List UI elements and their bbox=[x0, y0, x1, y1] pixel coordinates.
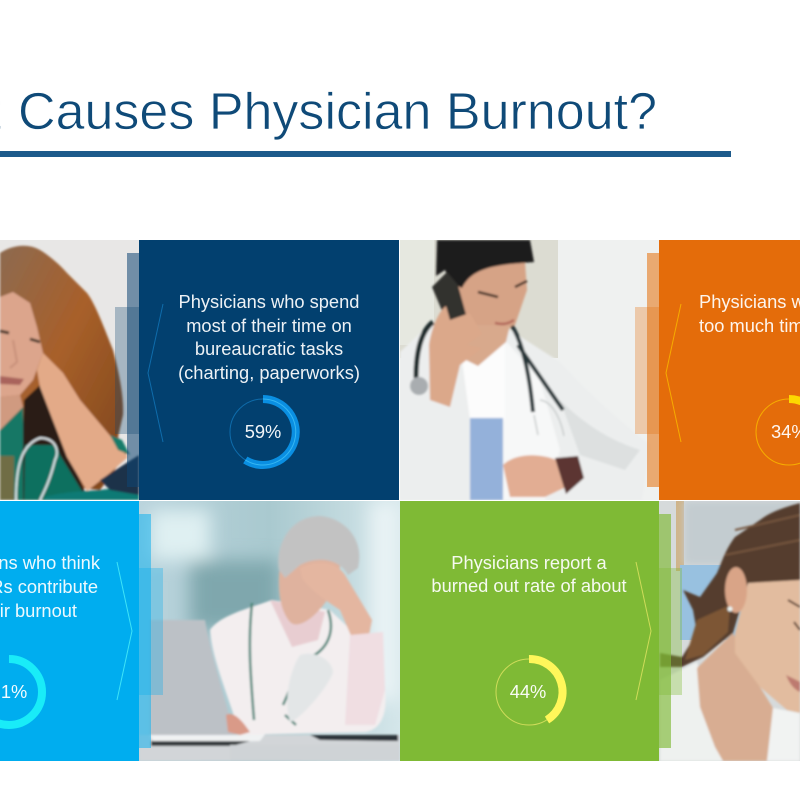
overlay bars: orange bbox=[635, 253, 659, 487]
chevron bbox=[666, 304, 681, 442]
chevron bbox=[148, 304, 163, 442]
title underline bbox=[0, 151, 731, 157]
overlay bars: green bbox=[659, 514, 682, 748]
chevron bbox=[636, 562, 651, 700]
panel: EHR time bbox=[659, 240, 800, 500]
ring chart: 59% bbox=[230, 399, 296, 465]
overlay bars: navy bbox=[115, 253, 139, 487]
title: Causes Physician Burnout? bbox=[18, 83, 657, 141]
ring chart: 44%: 44% bbox=[510, 681, 546, 702]
panel text: Physicians who spend bbox=[179, 291, 359, 312]
ring chart: 34% bbox=[756, 399, 800, 465]
panel text: (charting, paperworks) bbox=[178, 362, 360, 383]
chevron bbox=[117, 562, 132, 700]
panel text: Physicians report a bbox=[451, 552, 608, 573]
panel: burned out rate bbox=[400, 501, 659, 761]
panel: EHRs contribute to burnout bbox=[0, 501, 139, 761]
ring chart: 59%: 59% bbox=[245, 421, 281, 442]
photo: nurse looking down bbox=[659, 501, 800, 761]
photo: tired physician with red hair bbox=[0, 240, 140, 500]
photo: doctor on phone checking watch bbox=[400, 240, 659, 500]
panel: bureaucratic tasks bbox=[139, 240, 399, 500]
photo: doctor at laptop with hand on forehead bbox=[139, 501, 400, 761]
ring chart: 71% bbox=[0, 659, 42, 725]
ring chart: 44% bbox=[496, 659, 563, 725]
panel text: most of their time on bbox=[186, 315, 352, 336]
overlay bars: blue bbox=[139, 514, 163, 748]
panel text: burned out rate of about bbox=[431, 575, 627, 596]
panel text: bureaucratic tasks bbox=[195, 338, 343, 359]
